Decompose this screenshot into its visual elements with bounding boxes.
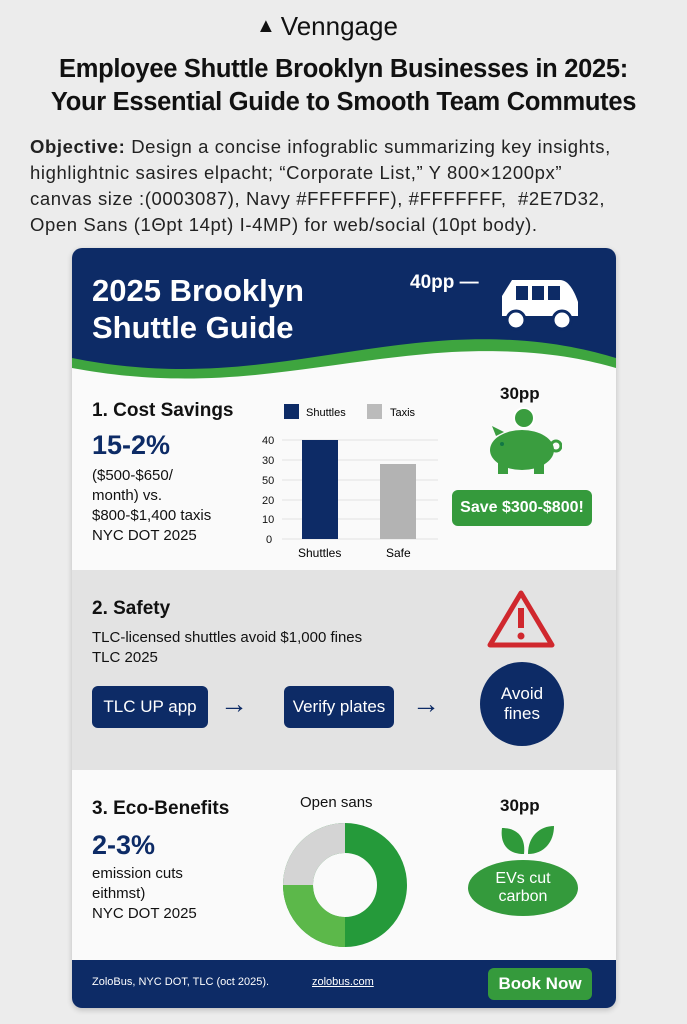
title: Your Essential Guide to Smooth Team Commutes (51, 88, 636, 116)
bar chart: 30 (262, 455, 274, 467)
header title (92, 273, 304, 345)
icon: warning (488, 590, 554, 648)
objective text: highlightnic sasires elpacht; “Corporate List,” Y 800×1200px” (30, 162, 562, 183)
text: TLC-licensed shuttles avoid $1,000 fines (92, 629, 362, 646)
button: save: Save $300-$800! (460, 499, 584, 516)
badge: EVs cut carbon: EVs cut (495, 870, 551, 887)
header title: 2025 Brooklyn (92, 273, 304, 308)
text: eithmst) (92, 885, 145, 902)
logo: ▲ (256, 14, 276, 36)
circle: avoid fines: Avoid (501, 684, 543, 703)
step: verify plates (284, 686, 394, 728)
stat: 15-2% (92, 430, 170, 460)
objective text (30, 136, 611, 235)
title: Employee Shuttle Brooklyn Businesses in 2025: (59, 55, 628, 83)
heading: 2. Safety (92, 598, 170, 619)
text: emission cuts (92, 865, 183, 882)
bar chart: 0 (266, 534, 272, 546)
section: cost savings (92, 384, 592, 558)
green wave (72, 339, 616, 378)
header title: Shuttle Guide (92, 310, 294, 345)
button: book now: Book Now (498, 974, 582, 993)
circle: avoid fines (480, 662, 564, 746)
bar chart: 10 (262, 514, 274, 526)
text (92, 467, 211, 544)
section: eco (92, 794, 578, 947)
objective text: Objective: Design a concise infograblic summarizing key insights, (30, 136, 611, 157)
text: ($500-$650/ (92, 467, 173, 484)
step: TLC UP app: TLC UP app (103, 697, 197, 716)
text (92, 865, 197, 922)
text: NYC DOT 2025 (92, 527, 197, 544)
button: book now (488, 968, 592, 1000)
arrow: → (412, 688, 440, 719)
text: NYC DOT 2025 (92, 905, 197, 922)
step: TLC UP app (92, 686, 208, 728)
text: month) vs. (92, 487, 162, 504)
bar chart: 40 (262, 435, 274, 447)
card (72, 248, 616, 1008)
bar chart: Shuttles (306, 407, 346, 419)
logo: Venngage (281, 10, 398, 40)
text: TLC 2025 (92, 649, 158, 666)
footer (72, 960, 616, 1008)
objective text: canvas size :(0003087), Navy #FFFFFFF), #FFFFFFF, #2E7D32, (30, 188, 605, 209)
badge: EVs cut carbon: carbon (499, 888, 547, 905)
bar chart (262, 404, 438, 558)
icon: piggy bank (490, 409, 562, 474)
donut chart (283, 823, 407, 947)
circle: avoid fines: fines (504, 704, 540, 723)
title (51, 55, 636, 116)
bar chart: 20 (262, 495, 274, 507)
step: verify plates: Verify plates (293, 697, 385, 716)
heading: 1. Cost Savings (92, 400, 234, 421)
section: safety (72, 570, 616, 770)
label 40pp: 40pp — (410, 272, 479, 293)
text (92, 629, 362, 666)
text: $800-$1,400 taxis (92, 507, 211, 524)
badge: EVs cut carbon (468, 860, 578, 916)
bar chart: Taxis (390, 407, 416, 419)
arrow: → (220, 688, 248, 719)
label 30pp: 30pp (500, 384, 540, 403)
heading: 3. Eco-Benefits (92, 798, 229, 819)
bar chart: 50 (262, 475, 274, 487)
objective text: Open Sans (1Θpt 14pt) I-4MP) for web/social (10pt body). (30, 214, 538, 235)
icon: leaves (502, 826, 554, 854)
button: save (452, 490, 592, 526)
label open sans: Open sans (300, 794, 373, 811)
icon: van (502, 280, 578, 328)
stat: 2-3% (92, 830, 155, 860)
header banner (72, 248, 616, 378)
url: zolobus.com (312, 976, 374, 988)
sources: ZoloBus, NYC DOT, TLC (oct 2025). (92, 976, 269, 988)
label 30pp: 30pp (500, 796, 540, 815)
